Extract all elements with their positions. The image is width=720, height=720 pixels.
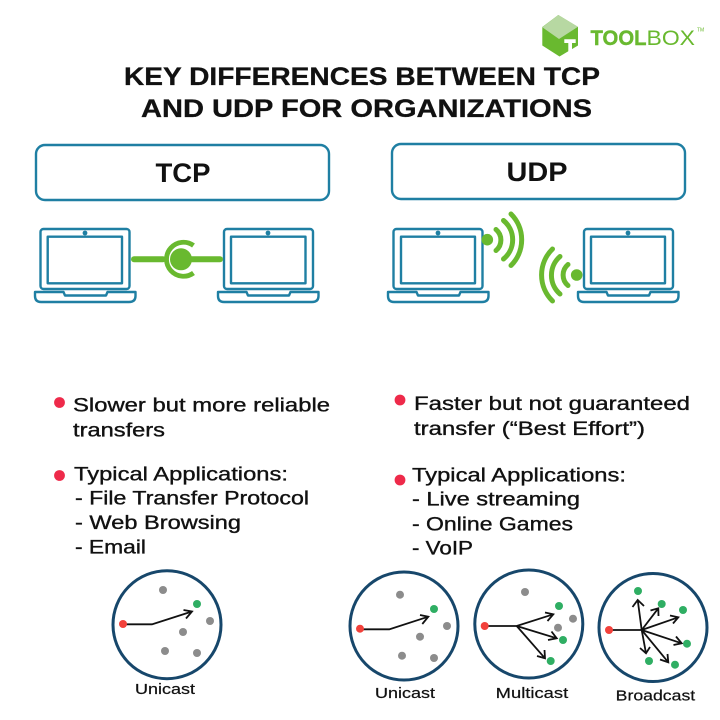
title: AND UDP FOR ORGANIZATIONS [141, 95, 592, 123]
title: KEY DIFFERENCES BETWEEN TCP [124, 63, 600, 91]
icon: wireless signal from left laptop [482, 214, 522, 266]
text block: UDP applications [395, 466, 626, 560]
icon: UDP left laptop [388, 229, 488, 302]
text block: TCP applications [54, 464, 309, 558]
icon: wireless signal from right laptop [542, 249, 582, 301]
panel: UDP heading: UDP [506, 157, 568, 187]
logo: Toolbox: TOOL [590, 26, 646, 50]
text block: UDP applications: - VoIP [412, 538, 473, 560]
text block: TCP applications: - Email [75, 537, 146, 558]
icon: UDP right laptop [578, 229, 678, 302]
diagram: UDP multicast [475, 570, 583, 702]
text block: TCP applications: Typical Applications: [74, 464, 288, 485]
text block: TCP applications: - File Transfer Protocol [75, 488, 309, 510]
icon: TCP right laptop [218, 229, 318, 302]
diagram: UDP unicast: Unicast [375, 686, 435, 702]
diagram: UDP broadcast [599, 574, 707, 704]
icon: TCP left laptop [35, 229, 136, 302]
diagram: UDP broadcast: Broadcast [616, 688, 695, 704]
diagram: TCP unicast: Unicast [135, 682, 195, 698]
text block: TCP speed: transfers [73, 420, 165, 442]
panel: TCP heading [36, 145, 329, 200]
icon: TCP wired connection [134, 242, 220, 276]
logo: Toolbox [542, 15, 704, 56]
text block: UDP applications: - Live streaming [412, 490, 580, 510]
title [124, 63, 600, 123]
text block: TCP speed: Slower but more reliable [73, 396, 330, 417]
text block: UDP applications: Typical Applications: [412, 466, 626, 486]
text block: UDP speed: transfer (“Best Effort”) [414, 419, 645, 440]
logo: Toolbox: BOX [646, 26, 695, 50]
text block: UDP speed: Faster but not guaranteed [414, 394, 690, 415]
text block: TCP applications: - Web Browsing [75, 513, 241, 534]
diagram: UDP unicast [350, 572, 458, 702]
text block: UDP speed [395, 394, 690, 440]
diagram: UDP multicast: Multicast [496, 686, 568, 702]
diagram: TCP unicast [113, 571, 221, 698]
text block: UDP applications: - Online Games [412, 514, 573, 536]
logo: Toolbox: TM [697, 28, 704, 34]
panel: UDP heading [392, 144, 685, 199]
text block: TCP speed [54, 396, 330, 442]
panel: TCP heading: TCP [156, 158, 210, 188]
